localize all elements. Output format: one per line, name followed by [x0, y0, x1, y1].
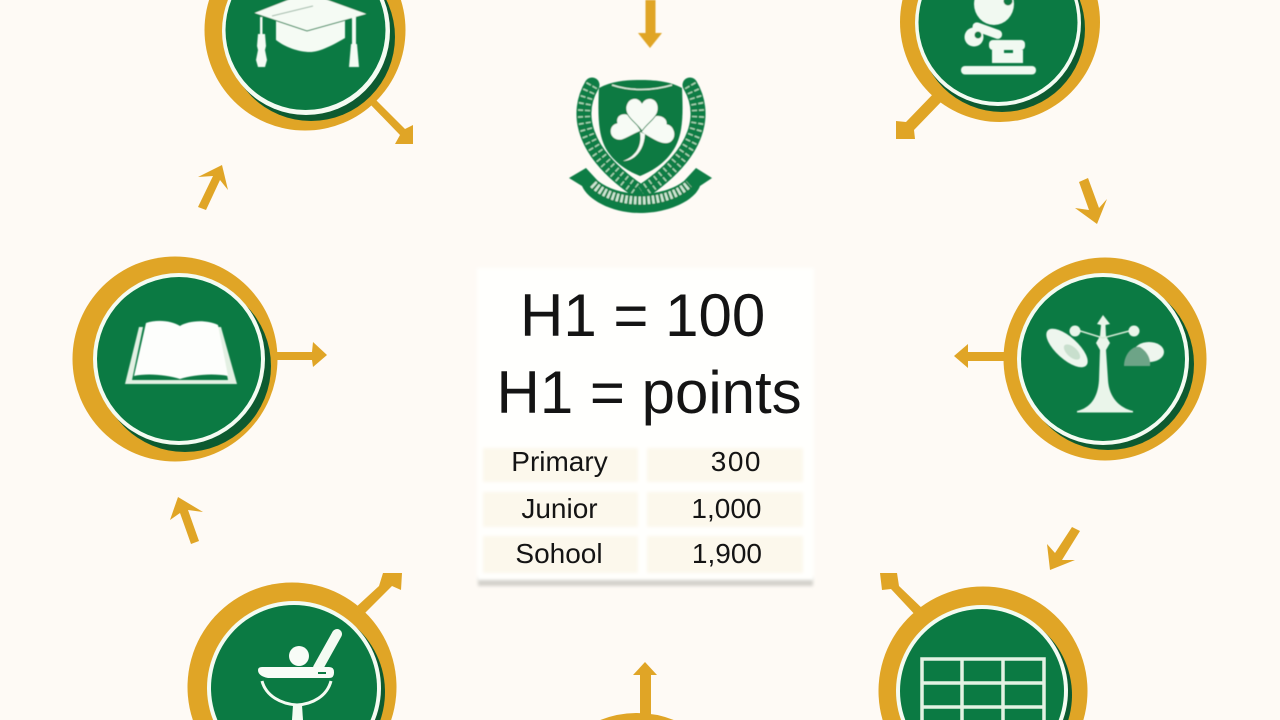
shield	[598, 80, 683, 176]
arrow: lower right	[1047, 527, 1080, 570]
row: Junior: 1,000	[691, 493, 762, 524]
disc	[915, 0, 1081, 106]
arrow: table out	[880, 573, 926, 619]
arrow: upper right	[1075, 178, 1107, 224]
row: School	[515, 538, 762, 569]
arrow: top centre	[638, 0, 662, 48]
node: graduation cap	[204, 0, 413, 144]
row backgrounds	[483, 448, 803, 573]
disc shadow	[1022, 278, 1194, 450]
node: balance scale	[954, 258, 1206, 460]
laurel right	[642, 85, 698, 192]
icon: open book	[125, 321, 237, 384]
heading: H1 = points: H1 = points	[496, 359, 802, 426]
disc shadow	[900, 609, 1072, 720]
points table	[483, 446, 803, 573]
row: School: Sohool	[515, 538, 603, 569]
disc	[896, 605, 1068, 720]
laurel left	[584, 85, 640, 192]
gold ring	[188, 582, 397, 720]
disc	[207, 601, 381, 720]
gold ring	[1004, 258, 1206, 460]
heading: H1 = 100: H1 = 100	[520, 282, 765, 349]
row: Primary: Primary	[511, 446, 608, 477]
row: School: 1,900	[692, 538, 762, 569]
crest emblem	[569, 80, 712, 213]
gold ring	[878, 586, 1088, 720]
node: microscope	[896, 0, 1100, 139]
arrow: scale out	[954, 344, 1006, 368]
card shadow	[478, 577, 813, 586]
arrow: cap out	[368, 97, 413, 144]
arrow: bottom centre	[633, 662, 657, 716]
node: bottom centre, cropped	[600, 662, 674, 720]
disc shadow	[227, 0, 395, 121]
arrow: lower left	[170, 497, 203, 544]
row: Junior: Junior	[521, 493, 598, 524]
disc	[93, 273, 265, 445]
arrow: book out	[274, 342, 327, 367]
gold ring	[72, 256, 278, 462]
icon: table grid	[920, 657, 1046, 720]
gold ring	[600, 713, 674, 720]
row: Junior	[521, 493, 762, 524]
centre card	[477, 268, 814, 586]
arrow: upper left	[198, 165, 228, 210]
card panel	[477, 268, 814, 580]
disc shadow	[99, 280, 271, 452]
disc	[1017, 273, 1189, 445]
arrow: mortar out	[354, 573, 402, 616]
disc	[222, 0, 390, 115]
icon: balance scale	[1040, 315, 1164, 412]
shamrock	[610, 98, 675, 161]
icon: mortar and pestle	[258, 634, 337, 720]
ribbon	[569, 168, 712, 213]
gold ring	[204, 0, 406, 130]
gold ring	[900, 0, 1100, 122]
row: Primary: 300	[711, 446, 762, 477]
row: Primary	[511, 446, 762, 477]
icon: graduation cap	[253, 0, 368, 67]
disc shadow	[211, 605, 385, 720]
node: open book	[72, 256, 327, 462]
disc shadow	[919, 0, 1085, 112]
icon: microscope	[961, 0, 1036, 74]
node: table grid	[878, 573, 1088, 720]
node: mortar and pestle	[188, 573, 402, 720]
arrow: microscope out	[896, 92, 943, 139]
